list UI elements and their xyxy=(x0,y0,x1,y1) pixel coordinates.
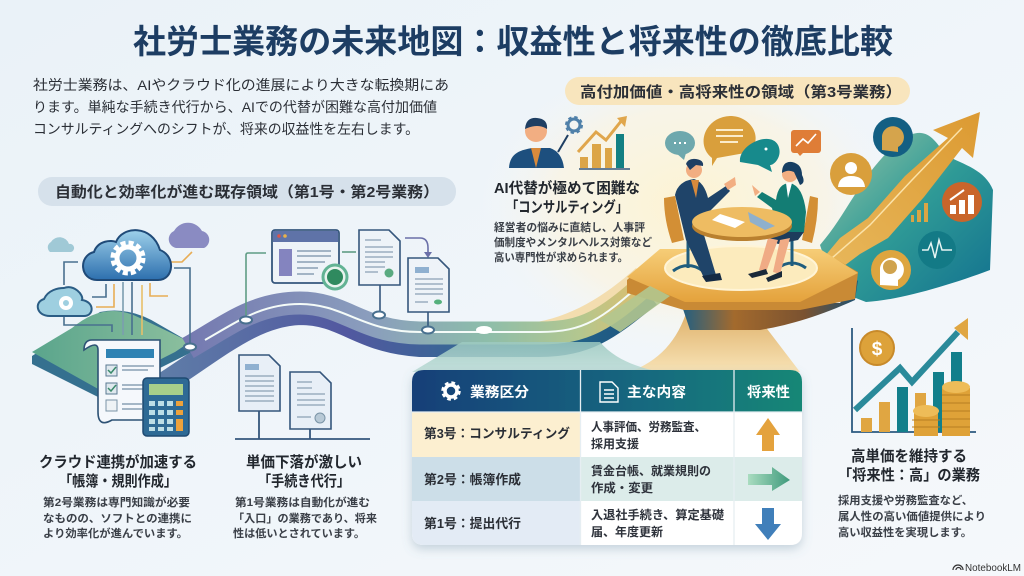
text block: consulting: 高い専門性が求められます。 xyxy=(494,250,628,264)
intro text block xyxy=(33,77,449,137)
chair: man xyxy=(664,196,684,243)
text block: ledger creation: より効率化が進んでいます。 xyxy=(43,526,188,540)
row: No.2: 作成・変更 xyxy=(591,480,653,495)
green base land xyxy=(32,311,200,398)
text block: high value business: 「将来性：高」の業務 xyxy=(838,466,980,484)
row: No.1: 届、年度更新 xyxy=(591,524,663,539)
text block: ledger creation: 「帳簿・規則作成」 xyxy=(59,472,177,490)
text block: consulting: AI代替が極めて困難な xyxy=(494,179,640,197)
text block: ledger creation: クラウド連携が加速する xyxy=(39,453,197,471)
icon: down arrow xyxy=(755,508,781,540)
row: No.3: 第3号：コンサルティング xyxy=(424,426,570,441)
comparison table xyxy=(412,370,802,545)
road glow point xyxy=(476,326,492,334)
speech bubble: chart xyxy=(791,130,821,156)
connector arrows xyxy=(64,252,192,344)
icon: up arrow xyxy=(756,418,780,451)
icon: rising bar chart with coins xyxy=(852,318,976,436)
table header: 業務区分 xyxy=(470,384,529,400)
intro text block: ります。単純な手続き代行から、AIでの代替が困難な高付加価値 xyxy=(33,99,437,115)
text block: consulting: 価制度やメンタルヘルス対策など xyxy=(494,235,652,249)
text block: high value business: 属人性の高い価値提供により xyxy=(838,509,986,523)
text block: procedure agency: 性は低いとされています。 xyxy=(233,526,365,540)
text block: high value business xyxy=(838,447,986,539)
text block: high value business: 高単価を維持する xyxy=(851,447,967,465)
small teal cloud xyxy=(48,237,74,252)
icon: ledger document xyxy=(84,340,189,436)
column lines xyxy=(412,370,802,545)
row: No.1: 第1号：提出代行 xyxy=(424,516,521,531)
icon: person circle xyxy=(830,153,872,195)
road node xyxy=(184,344,196,350)
row: No.1: 入退社手続き、算定基礎 xyxy=(591,507,724,522)
heading pill: existing domain: 自動化と効率化が進む既存領域（第1号・第2号業務） xyxy=(55,183,439,201)
consultation scene xyxy=(664,116,821,282)
row: No.2 xyxy=(412,457,802,501)
speech bubble: gold xyxy=(704,116,756,166)
icon: growth circle xyxy=(942,182,982,222)
row: No.2: 第2号：帳簿作成 xyxy=(424,472,521,487)
icon: main gear xyxy=(113,243,143,273)
heading pill: existing domain xyxy=(38,177,456,206)
heading pill: high value domain xyxy=(565,77,910,105)
row: No.1 xyxy=(412,501,724,545)
text block: consulting: 「コンサルティング」 xyxy=(506,198,628,216)
text block: consulting xyxy=(494,179,652,264)
speech bubble: small xyxy=(665,131,695,160)
main cloud xyxy=(83,230,171,280)
cream fan above road towards platform xyxy=(530,268,652,324)
light cones to table xyxy=(412,300,800,372)
browser window xyxy=(272,230,356,289)
text block: procedure agency: 「手続き代行」 xyxy=(258,473,350,490)
icon: right arrow xyxy=(748,467,790,491)
icon: lower documents on ground line xyxy=(235,355,370,439)
icon: browser and upper documents xyxy=(240,230,449,334)
title: 社労士業務の未来地図：収益性と将来性の徹底比較 xyxy=(133,23,893,60)
intro text block: 社労士業務は、AIやクラウド化の進展により大きな転換期にあ xyxy=(33,77,449,93)
text block: ledger creation xyxy=(39,453,197,540)
table body xyxy=(412,412,802,545)
icon: cloud network xyxy=(38,223,209,350)
woman xyxy=(748,162,806,282)
text block: consulting: 経営者の悩みに直結し、人事評 xyxy=(494,220,645,234)
heading pill: high value domain: 高付加価値・高将来性の領域（第3号業務） xyxy=(580,83,902,101)
icon: gear xyxy=(443,383,459,399)
coin: $ xyxy=(872,339,883,360)
document xyxy=(359,230,400,318)
icon: pulse circle xyxy=(918,231,956,269)
icon: calculator xyxy=(143,378,189,436)
row: No.3 xyxy=(412,412,706,457)
row: No.3: 採用支援 xyxy=(591,436,639,451)
text block: ledger creation: なものの、ソフトとの連携に xyxy=(43,511,192,525)
text block: high value business: 高い収益性を実現します。 xyxy=(838,525,972,539)
intro text block: コンサルティングへのシフトが、将来の収益性を左右します。 xyxy=(33,121,419,137)
mountain xyxy=(820,133,993,302)
table header: 将来性 xyxy=(747,384,790,400)
icon: brain head circle xyxy=(871,250,911,290)
warm glow behind consulting scene xyxy=(480,55,900,355)
purple cloud xyxy=(169,223,209,248)
central gold platform xyxy=(627,246,858,330)
document xyxy=(405,238,449,334)
icon: brain circle xyxy=(873,117,913,157)
table header: 主な内容 xyxy=(627,384,686,400)
small cloud xyxy=(38,287,92,316)
icon: consultant and chart xyxy=(509,116,630,169)
text block: procedure agency: 第1号業務は自動化が進む xyxy=(235,495,370,509)
table header xyxy=(412,370,802,412)
row: No.3: 人事評価、労務監査、 xyxy=(591,419,706,434)
small bars xyxy=(911,203,928,222)
speech bubble: teal xyxy=(740,139,780,172)
road joining platform xyxy=(600,286,670,332)
arrow xyxy=(820,112,980,272)
text block: procedure agency: 単価下落が激しい xyxy=(246,453,362,471)
row: No.2: 賃金台帳、就業規則の xyxy=(591,463,711,478)
man xyxy=(675,159,736,282)
text block: ledger creation: 第2号業務は専門知識が必要 xyxy=(43,495,190,509)
teal mountain with rising arrow xyxy=(820,112,993,302)
table xyxy=(692,207,792,241)
text block: high value business: 採用支援や労務監査など、 xyxy=(838,493,973,507)
chair: woman xyxy=(802,196,818,243)
icon: list document xyxy=(600,382,618,402)
notebooklm mark: NotebookLM xyxy=(965,563,1021,574)
coin stacks xyxy=(914,412,938,436)
road path xyxy=(150,282,650,392)
text block: procedure agency xyxy=(233,453,377,540)
text block: procedure agency: 「入口」の業務であり、将来 xyxy=(233,511,377,525)
